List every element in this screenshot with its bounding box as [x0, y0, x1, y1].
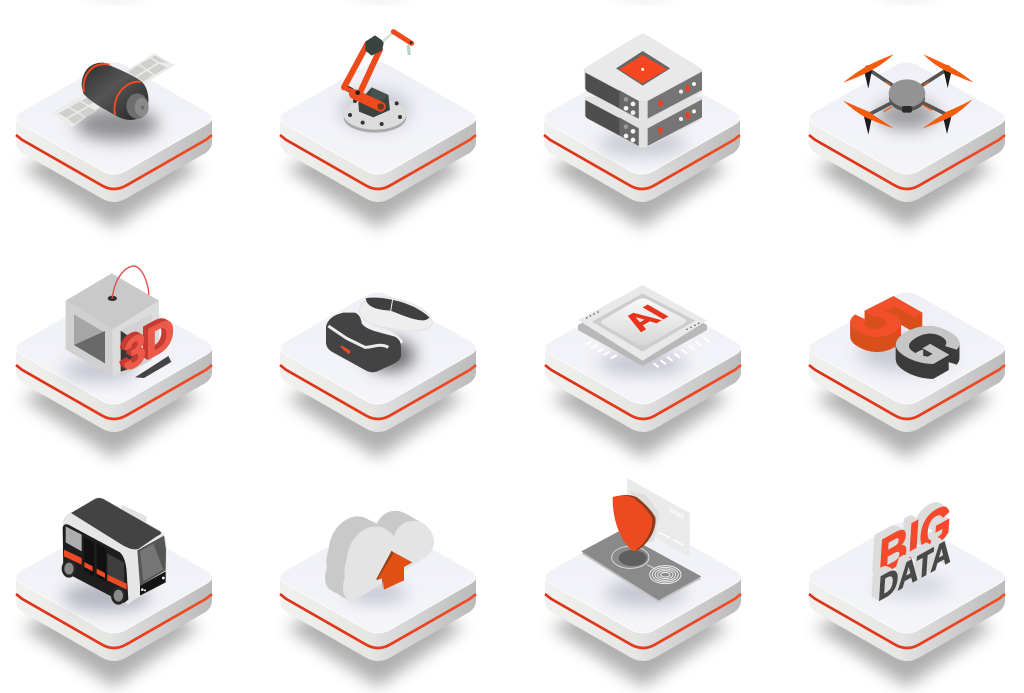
icon: 3D printer	[63, 266, 174, 382]
icon: robot arm	[340, 32, 412, 133]
platform: servers	[544, 62, 740, 228]
shield	[613, 491, 659, 551]
platform: autonomous bus	[16, 521, 212, 687]
icons row 2, right half	[578, 285, 984, 377]
platform: 5G	[809, 292, 1005, 458]
platform: security	[545, 521, 741, 687]
platform: robot arm	[280, 62, 476, 228]
platform: satellite	[16, 62, 212, 228]
icon: satellite	[52, 53, 175, 141]
icon: 5G: 5	[827, 285, 941, 351]
icon: security shield, phone and bank card	[581, 478, 701, 606]
upper server unit	[584, 33, 702, 120]
icon: drone	[843, 54, 974, 135]
icon: cloud upload	[343, 521, 434, 603]
platform: VR headset	[280, 292, 476, 458]
bank card: BANK	[670, 507, 684, 522]
phone	[581, 531, 701, 602]
icon: 5G	[827, 285, 984, 377]
icon: 3D printer: 3D	[124, 307, 174, 382]
icon: 5G: G	[871, 312, 984, 377]
platform: big data	[809, 521, 1005, 687]
icon: BIG DATA lettering: DATA	[877, 531, 952, 610]
platform: drone	[809, 62, 1005, 228]
icons row 3, left half	[62, 497, 434, 611]
icon: VR headset	[326, 297, 432, 372]
icons row 2, left half	[63, 266, 432, 382]
platform: 3D printer	[16, 292, 212, 458]
icons row 3, right half	[581, 478, 953, 610]
icons row 1, right half	[584, 33, 974, 157]
platform: AI chip	[545, 292, 741, 458]
icon: AI chip	[578, 285, 709, 375]
icon: BIG DATA lettering: BIG	[877, 492, 953, 588]
icon: server stack	[584, 33, 702, 157]
icon: autonomous bus	[62, 497, 167, 611]
icon: AI chip: AI	[615, 301, 676, 336]
lower server unit	[585, 97, 702, 148]
platform: cloud upload	[280, 521, 476, 687]
icons row 1, left half	[52, 32, 412, 141]
